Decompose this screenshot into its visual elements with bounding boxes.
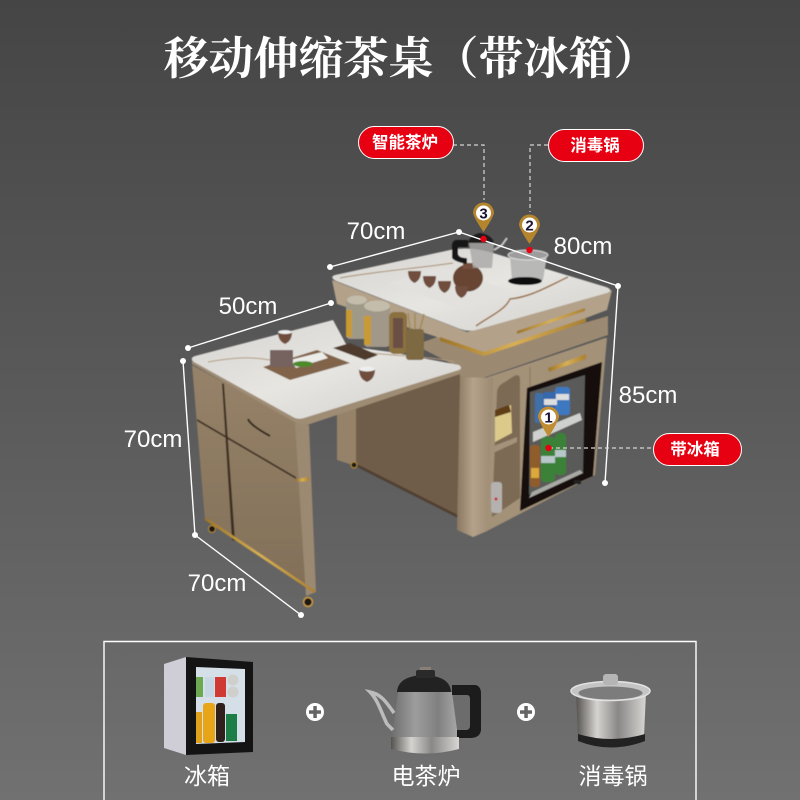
tea jars bbox=[346, 296, 424, 360]
icon: plus 2 bbox=[517, 703, 535, 721]
dimension labels: 70cm bbox=[188, 570, 246, 597]
side table marble top bbox=[192, 320, 461, 425]
title: 移动伸缩茶桌（带冰箱） bbox=[163, 34, 659, 84]
icon: mini fridge bbox=[164, 657, 253, 755]
pin 1: 1 bbox=[544, 410, 553, 426]
fridge bottles bbox=[530, 433, 566, 487]
dimension labels: 70cm bbox=[124, 426, 182, 453]
fridge bbox=[520, 362, 602, 511]
kettle on table bbox=[452, 233, 507, 268]
callout: sterilizer pot bbox=[548, 130, 644, 162]
pin 2: 2 bbox=[525, 218, 534, 234]
tea tray and cups on side table bbox=[263, 330, 378, 382]
main cabinet bbox=[415, 316, 608, 537]
dimension labels bbox=[124, 218, 677, 597]
callout: smart tea stove bbox=[358, 126, 454, 158]
upper tabletop body bbox=[332, 280, 612, 356]
pin 1 bbox=[538, 406, 559, 451]
label: fridge: 冰箱 bbox=[184, 763, 230, 789]
dimension labels: 85cm bbox=[619, 382, 677, 409]
callout: fridge bbox=[654, 434, 742, 466]
panel: accessories bbox=[104, 642, 696, 800]
pin 2 bbox=[519, 214, 540, 253]
cabinet drawer handle bbox=[548, 354, 586, 372]
dimension lines bbox=[180, 229, 621, 618]
open shelf niche bbox=[491, 375, 520, 517]
side table cabinet bbox=[192, 365, 316, 606]
upper marble top bbox=[332, 249, 610, 331]
sterilizer pot on table bbox=[508, 250, 548, 285]
pin 3: 3 bbox=[479, 206, 488, 222]
product illustration: tea table bbox=[192, 233, 612, 606]
main cabinet left column bbox=[457, 377, 493, 537]
pin 3 bbox=[473, 203, 494, 242]
callout: fridge: 带冰箱 bbox=[670, 440, 720, 459]
label: sterilizer pot: 消毒锅 bbox=[578, 763, 648, 789]
label: electric tea stove: 电茶炉 bbox=[392, 763, 460, 789]
dimension labels: 70cm bbox=[347, 218, 405, 245]
callout: sterilizer pot: 消毒锅 bbox=[570, 136, 620, 155]
tea set on upper table bbox=[408, 263, 483, 298]
fridge cans bbox=[535, 387, 570, 423]
callout connector lines bbox=[453, 145, 653, 448]
dimension labels: 50cm bbox=[219, 293, 277, 320]
icon: plus 1 bbox=[306, 703, 324, 721]
callout: smart tea stove: 智能茶炉 bbox=[372, 132, 438, 152]
icon: electric kettle bbox=[370, 667, 481, 754]
extending table: rear panel bbox=[337, 372, 460, 519]
icon: sterilizer pot bbox=[571, 674, 650, 748]
dimension labels: 80cm bbox=[554, 233, 612, 260]
